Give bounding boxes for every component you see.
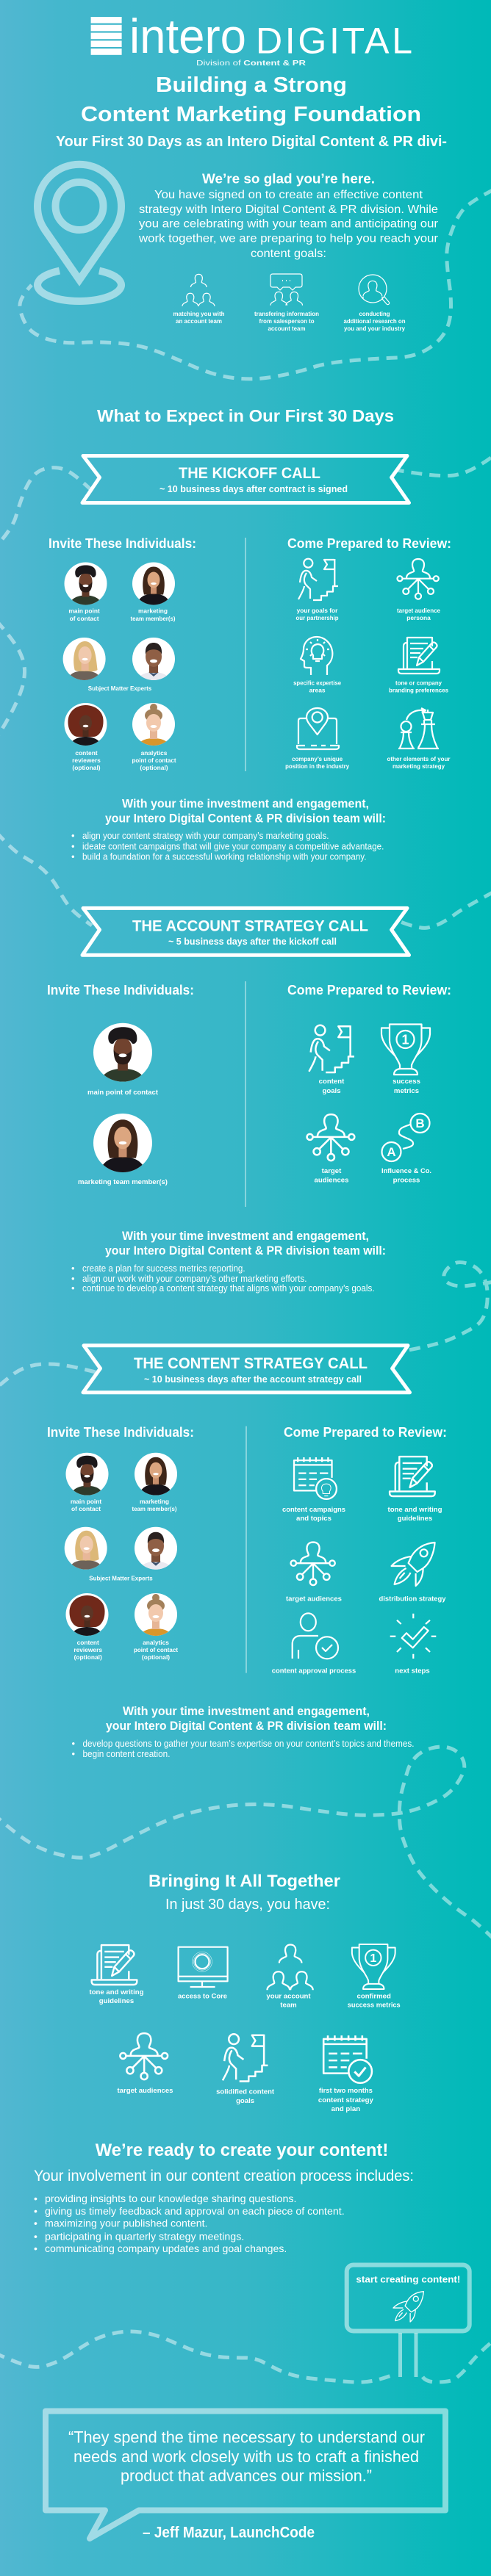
label: research — [344, 310, 406, 332]
bullet list: • — [34, 2218, 37, 2229]
avatar: marketing — [132, 563, 175, 605]
banner: kickoff: ~ 10 business days after contract is signed — [160, 483, 348, 494]
label: goals — [216, 2088, 275, 2105]
label: analytics: (optional) — [140, 764, 168, 771]
label: main point: main point — [71, 1498, 101, 1505]
icon: laptop pin — [297, 708, 339, 749]
icon: goals — [223, 2034, 268, 2081]
label: account team: your account — [266, 1993, 311, 2001]
label: main point: of contact — [70, 615, 99, 622]
label: expertise: areas — [309, 686, 326, 693]
bullet list: • — [71, 1263, 75, 1274]
label: account team: team — [280, 2002, 297, 2010]
label: next steps: next steps — [395, 1667, 430, 1675]
heading: invite: Invite These Individuals: — [47, 983, 194, 997]
label: reviewers: reviewers — [74, 1646, 102, 1653]
label: strategy and plan — [318, 2087, 374, 2113]
avatar: reviewers — [65, 703, 107, 746]
label: marketing: marketing — [138, 607, 168, 615]
label: strategy and plan: content strategy — [318, 2096, 374, 2104]
label: writing guidelines: tone and writing — [90, 1988, 144, 1996]
label: writing guidelines: guidelines — [398, 1515, 432, 1523]
icon: A to B: B — [415, 1116, 425, 1130]
label: campaigns: content campaigns — [282, 1506, 345, 1514]
heading: invite: Invite These Individuals: — [47, 1425, 194, 1440]
label: main point — [68, 607, 100, 622]
heading: review: Come Prepared to Review: — [287, 536, 451, 551]
label: main point — [71, 1498, 101, 1512]
icon: trophy: 1 — [401, 1033, 409, 1047]
label: marketing — [131, 607, 176, 622]
text: team commitment heading: With your time investment and engagement, — [122, 796, 369, 810]
intro text block: We’re so glad you’re here. — [202, 170, 375, 187]
label: audiences: target audiences — [118, 2087, 173, 2095]
label: campaigns: and topics — [296, 1515, 331, 1523]
label: content goals — [319, 1078, 345, 1095]
title: Content Marketing Foundation — [81, 103, 421, 126]
bullet list: • — [71, 851, 75, 862]
label: unique position — [285, 755, 349, 770]
icon: calendar with bulb — [294, 1457, 337, 1499]
label: matching — [173, 310, 225, 325]
label: influence process: Influence & Co. — [381, 1167, 431, 1175]
bullet list: • — [34, 2243, 37, 2254]
label: reviewers — [72, 749, 101, 771]
quote text: product that advances our mission.” — [121, 2467, 372, 2485]
bullet list: providing insights to our knowledge sharing questions. — [45, 2193, 297, 2204]
intro text block: strategy with Intero Digital Content & PR division. While — [139, 203, 438, 216]
label: transferring: account team — [268, 325, 306, 332]
banner: content strategy — [83, 1346, 410, 1393]
bullet list: • — [71, 840, 75, 852]
bullet list: begin content creation. — [82, 1748, 171, 1759]
label: experts: Subject Matter Experts — [89, 1575, 153, 1582]
bullet list: • — [72, 1738, 75, 1749]
heading: ready to create: We’re ready to create your content! — [96, 2140, 388, 2160]
icon: A to B — [382, 1114, 429, 1161]
label: analytics — [132, 749, 176, 771]
label: main point: of contact — [71, 1505, 101, 1512]
label: success metrics: confirmed — [357, 1993, 391, 2001]
label: research: additional research on — [344, 317, 406, 325]
logo — [91, 9, 412, 68]
subheading: involvement: Your involvement in our content creation process includes: — [34, 2168, 414, 2184]
avatar: analytics — [132, 703, 175, 746]
logo division line: Division of Content & PR — [196, 59, 307, 68]
label: marketing: team member(s) — [132, 1505, 177, 1512]
label: strategy and plan: first two months — [319, 2087, 373, 2095]
icon: goals — [298, 559, 338, 600]
label: tone: tone or company — [395, 679, 442, 687]
label: writing guidelines — [90, 1988, 144, 2005]
bullet list — [71, 1263, 375, 1294]
intro text block: you are celebrating with your team and anticipating our — [139, 218, 439, 231]
label: reviewers: content — [75, 749, 98, 757]
subtitle: Your First 30 Days as an Intero Digital Content & PR divi- — [56, 133, 447, 150]
bullet list — [72, 1738, 415, 1759]
text: team commitment heading: your Intero Digital Content & PR division team will: — [105, 812, 386, 826]
label: success metrics — [348, 1993, 401, 2010]
avatar: expert one — [65, 1527, 107, 1570]
label: unique position: position in the industry — [285, 762, 349, 770]
review grid — [285, 559, 451, 770]
bullet list: • — [34, 2205, 37, 2217]
label: audience — [397, 607, 440, 621]
banner: account strategy: ~ 5 business days after the kickoff call — [168, 936, 337, 947]
label: analytics: analytics — [141, 749, 168, 757]
label: other elements — [387, 755, 451, 770]
label: matching: matching you with — [173, 310, 225, 317]
label: influence process — [381, 1167, 431, 1184]
label: other elements: marketing strategy — [393, 762, 445, 770]
icon: matching team — [182, 274, 215, 306]
quote text: needs and work closely with us to craft a finished — [74, 2447, 419, 2466]
label: main point: main point of contact — [87, 1089, 159, 1097]
quote text — [68, 2428, 425, 2485]
bullet list: • — [71, 1273, 75, 1284]
banner: account strategy: THE ACCOUNT STRATEGY CALL — [132, 918, 368, 935]
label: marketing — [132, 1498, 177, 1512]
label: target audiences — [315, 1167, 348, 1184]
bullet list: communicating company updates and goal changes. — [45, 2243, 287, 2254]
logo stripes — [91, 17, 122, 55]
bullet list — [34, 2193, 345, 2254]
icon: audience — [120, 2033, 168, 2079]
sign text: start creating content! — [356, 2274, 460, 2285]
label: marketing: team member(s) — [131, 615, 176, 622]
heading: Bringing It All Together — [148, 1871, 340, 1890]
label: success metrics: success metrics — [348, 2002, 401, 2010]
icon: chat and people — [270, 274, 303, 306]
label: strategy and plan: and plan — [331, 2105, 360, 2113]
label: reviewers: (optional) — [74, 1653, 102, 1661]
label: audiences: target audiences — [286, 1595, 342, 1603]
label: reviewers: (optional) — [72, 764, 101, 771]
icon: trophy — [381, 1024, 430, 1075]
icon: trophy: 1 — [370, 1952, 376, 1965]
label: audience: persona — [406, 614, 431, 621]
bullet list: • — [34, 2230, 37, 2242]
icon: expertise head — [301, 637, 332, 675]
label: unique position: company’s unique — [292, 755, 343, 762]
label: success metrics: metrics — [394, 1087, 419, 1095]
label: target audiences: audiences — [315, 1177, 348, 1184]
label: writing guidelines — [388, 1506, 442, 1523]
intro text block: work together, we are preparing to help you reach your — [138, 232, 439, 245]
label: success metrics: success — [393, 1078, 420, 1086]
label: goals: goals — [236, 2097, 254, 2105]
icon: next steps — [390, 1614, 436, 1659]
icon: content goals — [309, 1025, 354, 1072]
label: matching: an account team — [176, 317, 222, 325]
label: reviewers: reviewers — [72, 757, 101, 764]
banner: account strategy — [82, 908, 409, 955]
banner: kickoff — [82, 455, 409, 502]
signpost — [347, 2265, 470, 2377]
avatar: marketing — [135, 1453, 177, 1496]
attribution: – Jeff Mazur, LaunchCode — [143, 2524, 315, 2541]
avatar: marketing — [93, 1114, 152, 1172]
heading: invite: Invite These Individuals: — [49, 536, 196, 551]
people grid — [63, 563, 176, 771]
subheading: In just 30 days, you have: — [165, 1897, 330, 1913]
banner: content strategy: THE CONTENT STRATEGY CALL — [134, 1355, 368, 1372]
label: approval: content approval process — [272, 1667, 356, 1675]
avatar: main point of contact — [65, 563, 107, 605]
bullet list: • — [72, 1748, 75, 1759]
banner: content strategy: ~ 10 business days after the account strategy call — [144, 1374, 362, 1385]
panel: bringing it all together — [90, 1871, 401, 2113]
label: goals: solidified content — [216, 2088, 275, 2096]
intro text block — [138, 170, 439, 260]
banner: kickoff: THE KICKOFF CALL — [179, 465, 320, 482]
label: expertise — [293, 679, 341, 693]
label: account team — [266, 1993, 311, 2010]
label: research: you and your industry — [344, 325, 405, 332]
panel: content strategy call — [47, 1346, 447, 1759]
review grid — [272, 1457, 446, 1675]
text: team commitment heading — [106, 1704, 387, 1733]
icon: chess strategy — [398, 708, 439, 748]
bullet list: align your content strategy with your company’s marketing goals. — [82, 830, 329, 841]
logo wordmark intero: intero — [129, 9, 246, 63]
icon: writing document — [390, 1457, 435, 1496]
text: team commitment heading: your Intero Digital Content & PR division team will: — [105, 1244, 386, 1258]
label: distribution: distribution strategy — [379, 1595, 446, 1603]
bullet list: • — [71, 830, 75, 841]
icon: trophy — [352, 1944, 395, 1989]
icon: tone document — [398, 638, 440, 674]
label: reviewers: content — [77, 1639, 99, 1646]
label: audience: target audience — [397, 607, 440, 614]
bullet list: • — [34, 2193, 37, 2204]
panel: intro steps — [173, 274, 406, 332]
text: team commitment heading: your Intero Digital Content & PR division team will: — [106, 1719, 387, 1733]
label: campaigns — [282, 1506, 345, 1523]
panel: account strategy call — [47, 908, 451, 1294]
bullet list — [71, 830, 384, 862]
label: target audiences: target — [322, 1167, 342, 1175]
label: main point: main point — [68, 607, 100, 615]
label: marketing: marketing team member(s) — [78, 1178, 168, 1186]
logo wordmark digital: DIGITAL — [256, 21, 412, 62]
icon: A to B: A — [387, 1145, 396, 1159]
bullet list: • — [71, 1282, 75, 1294]
heading: review: Come Prepared to Review: — [287, 983, 451, 997]
label: expertise: specific expertise — [293, 679, 341, 687]
icon: monitor — [179, 1947, 228, 1987]
heading: what to expect: What to Expect in Our First 30 Days — [97, 406, 394, 425]
label: writing guidelines: guidelines — [99, 1997, 134, 2005]
bullet list: ideate content campaigns that will give your company a competitive advantage. — [82, 840, 384, 852]
quote text: “They spend the time necessary to understand our — [68, 2428, 425, 2446]
avatar: main point of contact — [66, 1453, 109, 1496]
icon: rocket — [392, 1543, 435, 1586]
avatar: reviewers — [66, 1593, 109, 1636]
text: team commitment heading: With your time investment and engagement, — [122, 1229, 369, 1243]
icon: research magnifier — [359, 275, 390, 305]
label: goals: our partnership — [295, 614, 338, 621]
label: goals: your goals for — [297, 607, 338, 614]
label: transferring: from salesperson to — [259, 317, 315, 325]
label: writing guidelines: tone and writing — [388, 1506, 442, 1514]
divider — [246, 1426, 247, 1673]
heading: review: Come Prepared to Review: — [284, 1425, 447, 1440]
icon: small rocket — [393, 2292, 423, 2322]
label: goals — [295, 607, 338, 621]
label: content goals: content — [319, 1078, 345, 1086]
label: reviewers — [74, 1639, 102, 1661]
avatar: analytics — [135, 1593, 177, 1636]
label: tone — [389, 679, 448, 693]
icon: location pin — [37, 165, 121, 301]
label: tone: branding preferences — [389, 686, 448, 693]
icon: audience — [397, 559, 439, 599]
icon: audience — [291, 1543, 335, 1585]
icon: writing document — [92, 1945, 137, 1985]
bullet list: participating in quarterly strategy meetings. — [45, 2230, 244, 2242]
label: analytics: point of contact — [134, 1646, 178, 1653]
label: research: conducting — [359, 310, 390, 317]
text: team commitment heading — [105, 796, 386, 826]
avatar: expert one — [63, 638, 106, 680]
bullet list: develop questions to gather your team’s expertise on your content’s topics and themes. — [82, 1738, 415, 1749]
label: success metrics — [393, 1078, 420, 1095]
text: team commitment heading — [105, 1229, 386, 1258]
bullet list: maximizing your published content. — [45, 2218, 207, 2229]
text: team commitment heading: With your time investment and engagement, — [123, 1704, 370, 1718]
avatar: main point of contact — [93, 1023, 152, 1082]
divider — [245, 981, 246, 1207]
label: other elements: other elements of your — [387, 755, 451, 762]
title: Building a Strong — [156, 73, 347, 97]
label: analytics — [134, 1639, 178, 1661]
bullet list: build a foundation for a successful working relationship with your company. — [82, 851, 366, 862]
label: analytics: (optional) — [142, 1653, 170, 1661]
label: content goals: goals — [322, 1087, 341, 1095]
icon: audience — [307, 1114, 354, 1161]
label: experts: Subject Matter Experts — [88, 685, 152, 692]
bullet list: create a plan for success metrics reporting. — [82, 1263, 246, 1274]
intro text block: content goals: — [251, 248, 326, 260]
label: influence process: process — [393, 1177, 420, 1184]
label: transferring — [254, 310, 319, 332]
bullet list: giving us timely feedback and approval on each piece of content. — [45, 2205, 345, 2217]
label: transferring: transfering information — [254, 310, 319, 317]
icon: approval person — [293, 1613, 338, 1659]
avatar: expert two — [135, 1527, 177, 1570]
icon: team — [268, 1945, 313, 1990]
label: analytics: analytics — [143, 1639, 169, 1646]
icon: calendar with check — [323, 2035, 372, 2083]
label: analytics: point of contact — [132, 757, 176, 764]
bullet list: align our work with your company’s other marketing efforts. — [82, 1273, 307, 1284]
panel: kickoff call — [49, 455, 451, 862]
label: marketing: marketing — [140, 1498, 169, 1505]
avatar: expert two — [132, 638, 175, 680]
label: core: access to Core — [178, 1993, 227, 2001]
quote bubble — [46, 2411, 445, 2541]
people grid — [65, 1453, 178, 1661]
divider — [245, 538, 246, 771]
bullet list: continue to develop a content strategy that aligns with your company’s goals. — [82, 1282, 375, 1294]
title — [81, 73, 421, 126]
intro text block: You have signed on to create an effective content — [154, 189, 423, 201]
